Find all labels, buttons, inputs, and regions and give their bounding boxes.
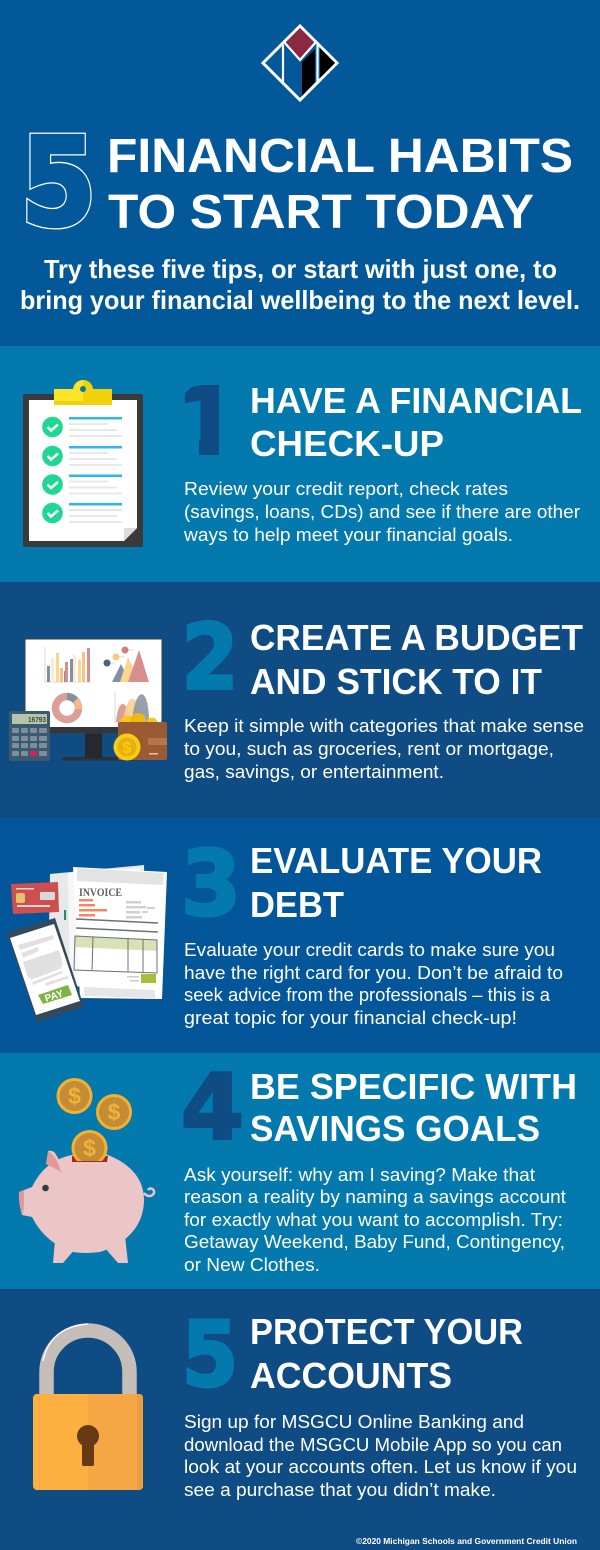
number 4: 4 [181, 1056, 244, 1160]
body text: Getaway Weekend, Baby Fund, Contingency, [184, 1231, 565, 1252]
icon: piggy bank with coins: $ [108, 1099, 121, 1125]
icon: padlock [33, 1324, 143, 1490]
panel: header [0, 0, 600, 346]
body text: great topic for your financial check-up! [184, 1007, 517, 1028]
heading: HAVE A FINANCIAL [250, 380, 582, 421]
panel: tip 1 financial check-up [0, 346, 600, 582]
heading: DEBT [250, 884, 344, 925]
outlined number 5: 5 [20, 112, 96, 254]
body text [184, 939, 563, 1028]
heading: SAVINGS GOALS [250, 1108, 540, 1149]
heading [250, 1066, 577, 1149]
panel: tip 4 savings [0, 1053, 600, 1289]
icon: invoice, credit card and phone: I [63, 907, 67, 924]
number 2: 2 [182, 606, 238, 710]
title: FINANCIAL HABITS [107, 130, 573, 183]
icon: invoice, credit card and phone [7, 865, 167, 1022]
body text: or New Clothes. [184, 1254, 320, 1275]
panel: tip 3 debt [0, 818, 600, 1053]
icon: monitor, calculator and wallet: $ [123, 740, 132, 757]
body text [184, 715, 584, 782]
heading: ACCOUNTS [250, 1355, 452, 1396]
heading: AND STICK TO IT [250, 661, 542, 702]
subtitle [20, 254, 580, 315]
body text: download the MSGCU Mobile App so you can [184, 1434, 562, 1455]
heading: CREATE A BUDGET [250, 617, 583, 658]
icon: monitor, calculator and wallet: 16793 [28, 717, 46, 724]
body text [184, 1411, 577, 1500]
copyright footer: ©2020 Michigan Schools and Government Credit Union [356, 1536, 577, 1546]
logo [263, 26, 337, 100]
panel: tip 5 protect accounts [0, 1289, 600, 1550]
icon: clipboard checklist [23, 380, 143, 547]
body text: to you, such as groceries, rent or mortgage, [184, 738, 554, 759]
body text: seek advice from the professionals – this is a [184, 984, 551, 1005]
title [107, 130, 573, 239]
icon: piggy bank with coins: $ [83, 1135, 96, 1161]
heading: PROTECT YOUR [250, 1311, 523, 1352]
number 3: 3 [181, 832, 241, 936]
heading: CHECK-UP [250, 423, 444, 464]
subtitle: bring your financial wellbeing to the next level. [20, 285, 580, 315]
body text [184, 1164, 566, 1275]
heading [250, 380, 582, 464]
heading [250, 1311, 523, 1396]
body text: ways to help meet your financial goals. [183, 524, 513, 545]
icon: invoice, credit card and phone: INVOICE [79, 887, 122, 899]
title: TO START TODAY [108, 186, 534, 239]
body text: have the right card for you. Don’t be afraid to [184, 962, 563, 983]
heading: EVALUATE YOUR [250, 840, 542, 881]
body text: for exactly what you want to accomplish. Try: [184, 1209, 563, 1230]
body text: Keep it simple with categories that make sense [184, 715, 584, 736]
subtitle: Try these five tips, or start with just one, to [44, 254, 557, 284]
panel: tip 2 budget [0, 582, 600, 818]
body text: Review your credit report, check rates [184, 478, 508, 499]
outlined number 5: 5 [20, 112, 96, 254]
body text: Evaluate your credit cards to make sure you [184, 939, 555, 960]
icon: piggy bank with coins: $ [68, 1083, 81, 1109]
body text: see a purchase that you didn’t make. [184, 1479, 496, 1500]
heading [250, 617, 583, 702]
number 5: 5 [182, 1302, 238, 1408]
icon: invoice, credit card and phone: PAY [44, 988, 65, 1005]
heading: BE SPECIFIC WITH [250, 1066, 577, 1107]
body text: Sign up for MSGCU Online Banking and [184, 1411, 524, 1432]
body text: reason a reality by naming a savings account [184, 1186, 566, 1207]
body text: gas, savings, or entertainment. [184, 761, 444, 782]
heading [250, 840, 542, 925]
icon: monitor, calculator and wallet [9, 639, 167, 761]
body text: look at your accounts often. Let us know if you [184, 1456, 577, 1477]
body text: (savings, loans, CDs) and see if there are other [184, 501, 580, 522]
number 1: 1 [176, 368, 240, 476]
icon: piggy bank with coins [19, 1080, 154, 1263]
body text: Ask yourself: why am I saving? Make that [184, 1164, 535, 1185]
body text [183, 478, 580, 545]
